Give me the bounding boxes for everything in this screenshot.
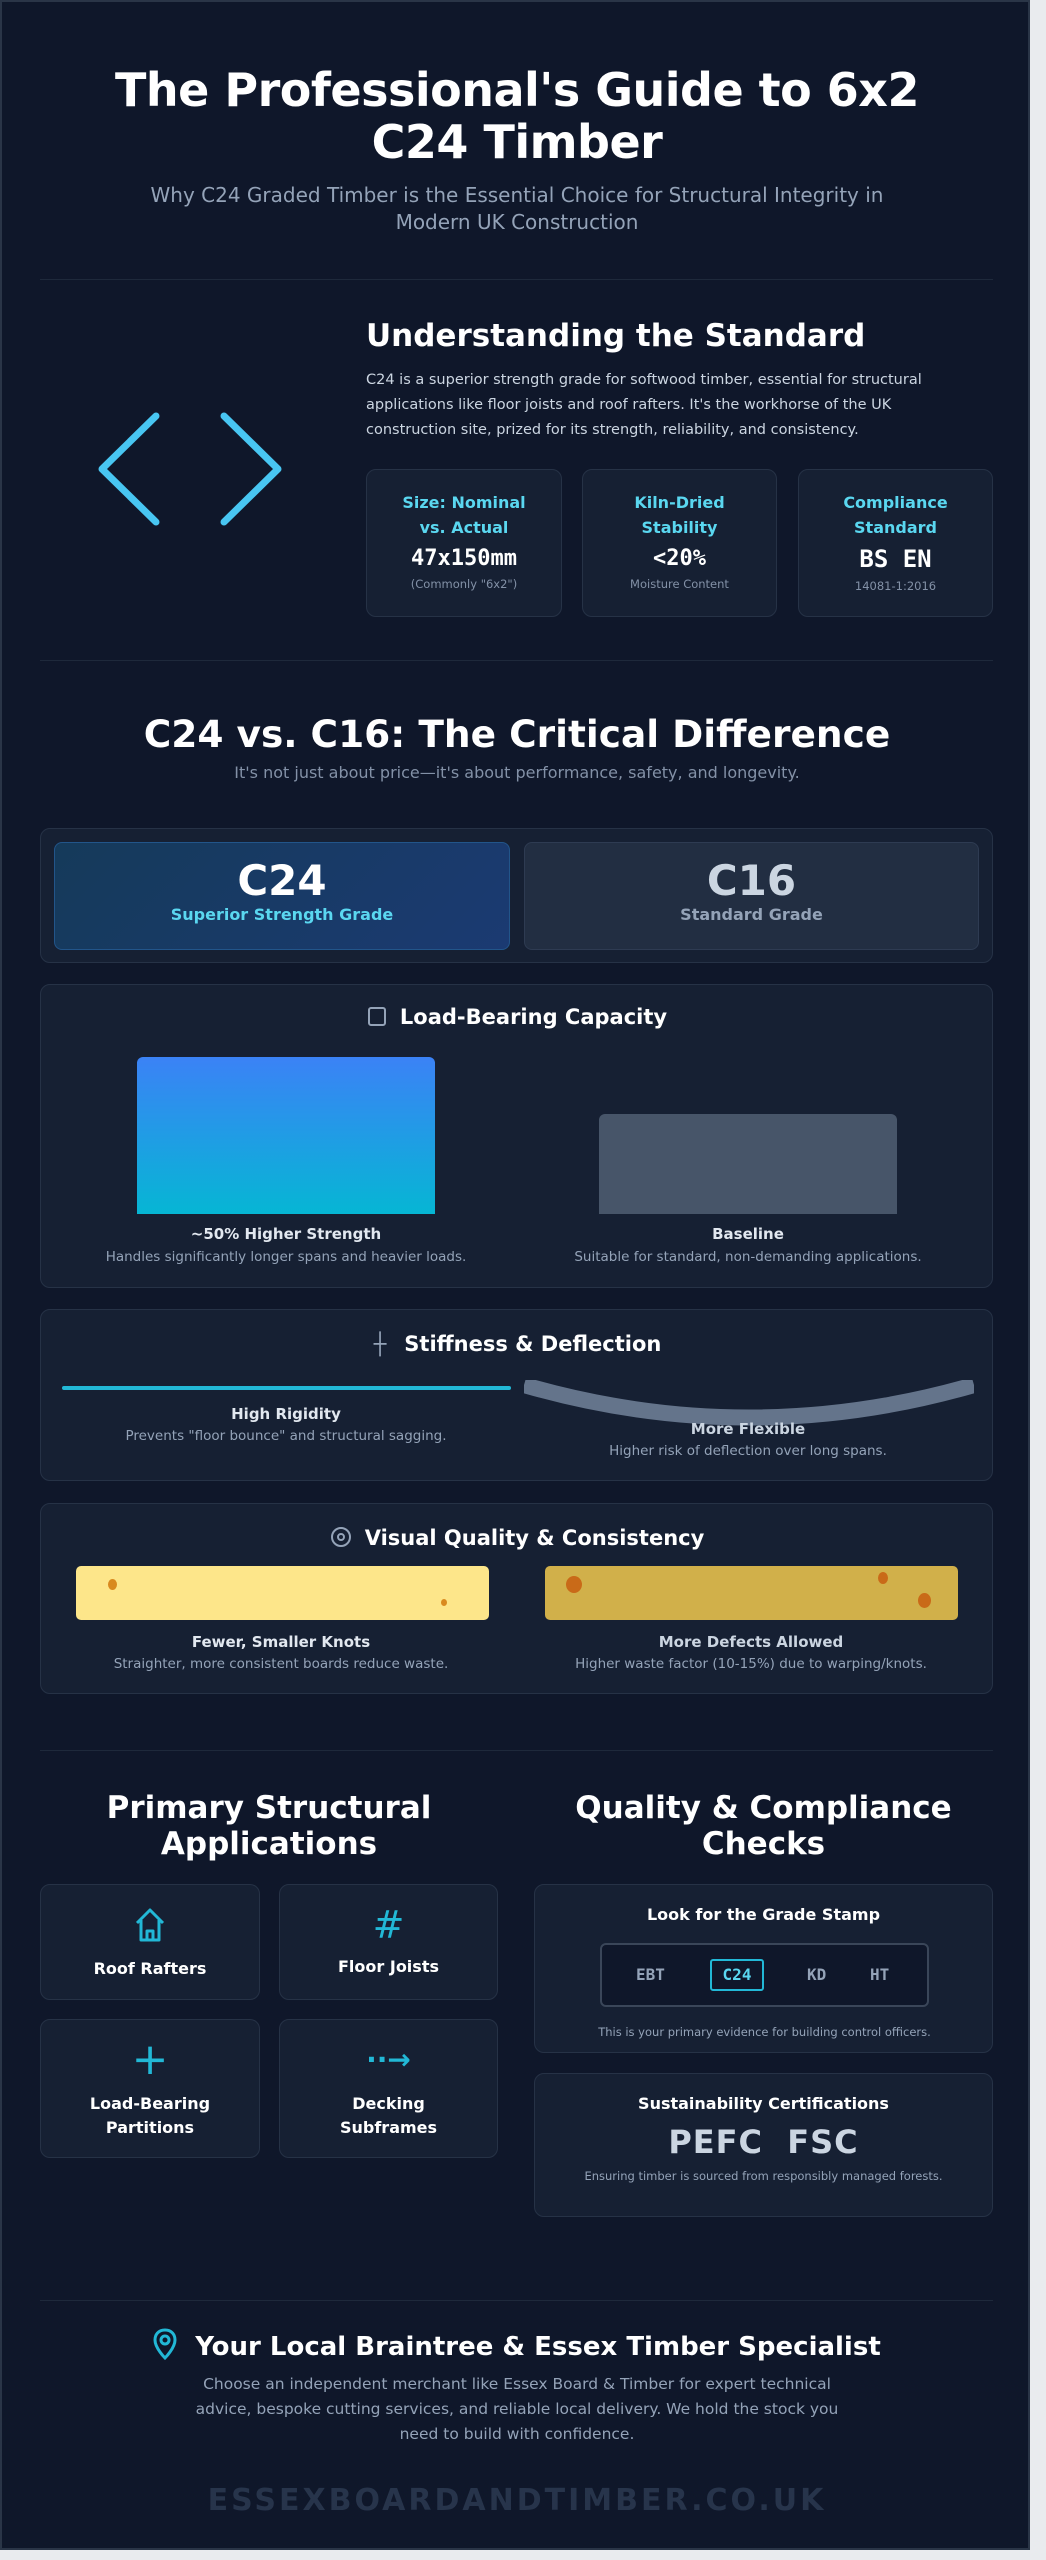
heading: applications: Primary Structural (107, 1790, 431, 1826)
stamp: HT (870, 1965, 889, 1984)
heading: applications (107, 1790, 431, 1862)
label: more flexible: More Flexible (691, 1420, 805, 1438)
heading: visual quality: Visual Quality & Consistency (365, 1526, 704, 1550)
label: fewer knots: Straighter, more consistent boards reduce waste. (114, 1656, 448, 1672)
stat card: compliance: BS EN (859, 545, 932, 573)
card: grade stamp (534, 1884, 993, 2053)
card: sustainability: Sustainability Certifications (638, 2094, 889, 2113)
heading: understanding the standard: Understanding the Standard (366, 318, 865, 354)
board: C24 (76, 1566, 489, 1620)
heading: applications: Applications (161, 1826, 377, 1862)
label: fewer knots: Fewer, Smaller Knots (192, 1633, 370, 1651)
certification logos: PEFC FSC (668, 2123, 859, 2161)
app card: load-bearing partitions: Partitions (106, 2118, 194, 2137)
stat card: compliance: 14081-1:2016 (855, 579, 936, 593)
stat card: compliance (798, 469, 993, 617)
label: more flexible: Higher risk of deflection over long spans. (609, 1443, 887, 1459)
label: C24 strength: ~50% Higher Strength (191, 1225, 381, 1243)
label: C24 strength (106, 1225, 466, 1265)
stamp (600, 1943, 929, 2007)
stat card: size: 47x150mm (411, 546, 517, 571)
grade: C16: C16 (707, 856, 796, 905)
app card: load-bearing partitions: Load-Bearing (90, 2094, 210, 2113)
stat card: size: Size: Nominal (402, 493, 526, 512)
panel: grade comparison (40, 828, 993, 963)
app card: decking subframes: Subframes (340, 2118, 437, 2137)
label: high rigidity: High Rigidity (231, 1405, 341, 1423)
label: high rigidity (125, 1405, 447, 1444)
text: footer description: Choose an independent merchant like Essex Board & Timber for expert technical advice, bespoke cutting services, and reliable local delivery. We hold the stock you need to build with confidence. (196, 2375, 838, 2443)
stat card: size: (Commonly "6x2") (411, 577, 517, 591)
heading: quality checks (575, 1790, 952, 1862)
title: The Professional's Guide to 6x2 (115, 63, 919, 117)
card: sustainability (534, 2073, 993, 2217)
card: grade stamp: Look for the Grade Stamp (647, 1905, 880, 1924)
label: C24 strength: Handles significantly longer spans and heavier loads. (106, 1249, 466, 1265)
stamp: C24 (723, 1965, 751, 1984)
stat card: kiln-dried: Moisture Content (630, 577, 729, 591)
grade: C24: C24 (237, 856, 327, 905)
label: more defects: More Defects Allowed (659, 1633, 843, 1651)
app card: decking subframes: Decking (352, 2094, 425, 2113)
label: more flexible (609, 1420, 887, 1459)
stat card: compliance: Compliance (843, 493, 948, 512)
bar: C24 (137, 1057, 435, 1214)
label: C16 baseline (574, 1225, 922, 1265)
panel: visual quality (40, 1503, 993, 1694)
stat card: compliance: Standard (854, 518, 937, 537)
panel: load-bearing capacity (40, 984, 993, 1288)
panel: stiffness & deflection (40, 1309, 993, 1481)
subtitle: comparison: It's not just about price—it's about performance, safety, and longevity. (234, 763, 800, 782)
label: C16 baseline: Baseline (712, 1225, 784, 1243)
app card: roof rafters (40, 1884, 260, 2000)
subtitle: Why C24 Graded Timber is the Essential Choice for Structural Integrity in Modern UK Construction (151, 183, 883, 234)
heading: quality checks: Quality & Compliance (575, 1790, 952, 1826)
card: grade stamp: This is your primary evidence for building control officers. (598, 2025, 931, 2039)
grade: C16 (524, 842, 979, 950)
stat card: kiln-dried: Kiln-Dried (634, 493, 725, 512)
app card: roof rafters: Roof Rafters (94, 1959, 206, 1978)
stat card: size: vs. Actual (420, 518, 508, 537)
stat card: kiln-dried: <20% (653, 546, 706, 571)
grade: C24 (54, 842, 510, 950)
grade: C24: Superior Strength Grade (171, 905, 393, 924)
heading: quality checks: Checks (702, 1826, 825, 1862)
stat card: kiln-dried (582, 469, 777, 617)
beam: rigid (62, 1386, 511, 1390)
heading: C24 vs C16: C24 vs. C16: The Critical Difference (144, 712, 890, 756)
label: more defects: Higher waste factor (10-15%) due to warping/knots. (575, 1656, 927, 1672)
website url: ESSEXBOARDANDTIMBER.CO.UK (208, 2483, 826, 2518)
stat card: size (366, 469, 562, 617)
icon: code chevrons (98, 412, 282, 526)
label: C16 baseline: Suitable for standard, non-demanding applications. (574, 1249, 922, 1265)
app card: load-bearing partitions (40, 2019, 260, 2158)
bar: C16 (599, 1114, 897, 1214)
beam: flexible (524, 1380, 974, 1426)
label: more defects (575, 1633, 927, 1672)
label: high rigidity: Prevents "floor bounce" and structural sagging. (125, 1428, 447, 1444)
app card: decking subframes: ··→ (366, 2043, 411, 2076)
heading: stiffness: ┼ Stiffness & Deflection (374, 1332, 661, 1356)
grade: C16: Standard Grade (680, 905, 823, 924)
card: sustainability: Ensuring timber is sourced from responsibly managed forests. (584, 2169, 943, 2183)
stat card: kiln-dried: Stability (642, 518, 717, 537)
board: C16 (545, 1566, 958, 1620)
heading: local specialist: Your Local Braintree & Essex Timber Specialist (195, 2332, 881, 2362)
label: fewer knots (114, 1633, 448, 1672)
app card: decking subframes (279, 2019, 498, 2158)
title (115, 63, 919, 169)
app card: floor joists: Floor Joists (338, 1957, 439, 1976)
heading: load-bearing: Load-Bearing Capacity (400, 1005, 667, 1029)
app card: load-bearing partitions: + (132, 2034, 168, 2085)
stamp: KD (807, 1965, 826, 1984)
app card: floor joists (279, 1884, 498, 2000)
stamp: EBT (636, 1965, 665, 1984)
app card: floor joists: # (373, 1903, 404, 1947)
title: C24 Timber (372, 115, 662, 169)
text: standard description: C24 is a superior strength grade for softwood timber, essential for structural applications like floor joists and roof rafters. It's the workhorse of the UK construction site, prized for its strength, reliability, and consistency. (366, 372, 922, 438)
